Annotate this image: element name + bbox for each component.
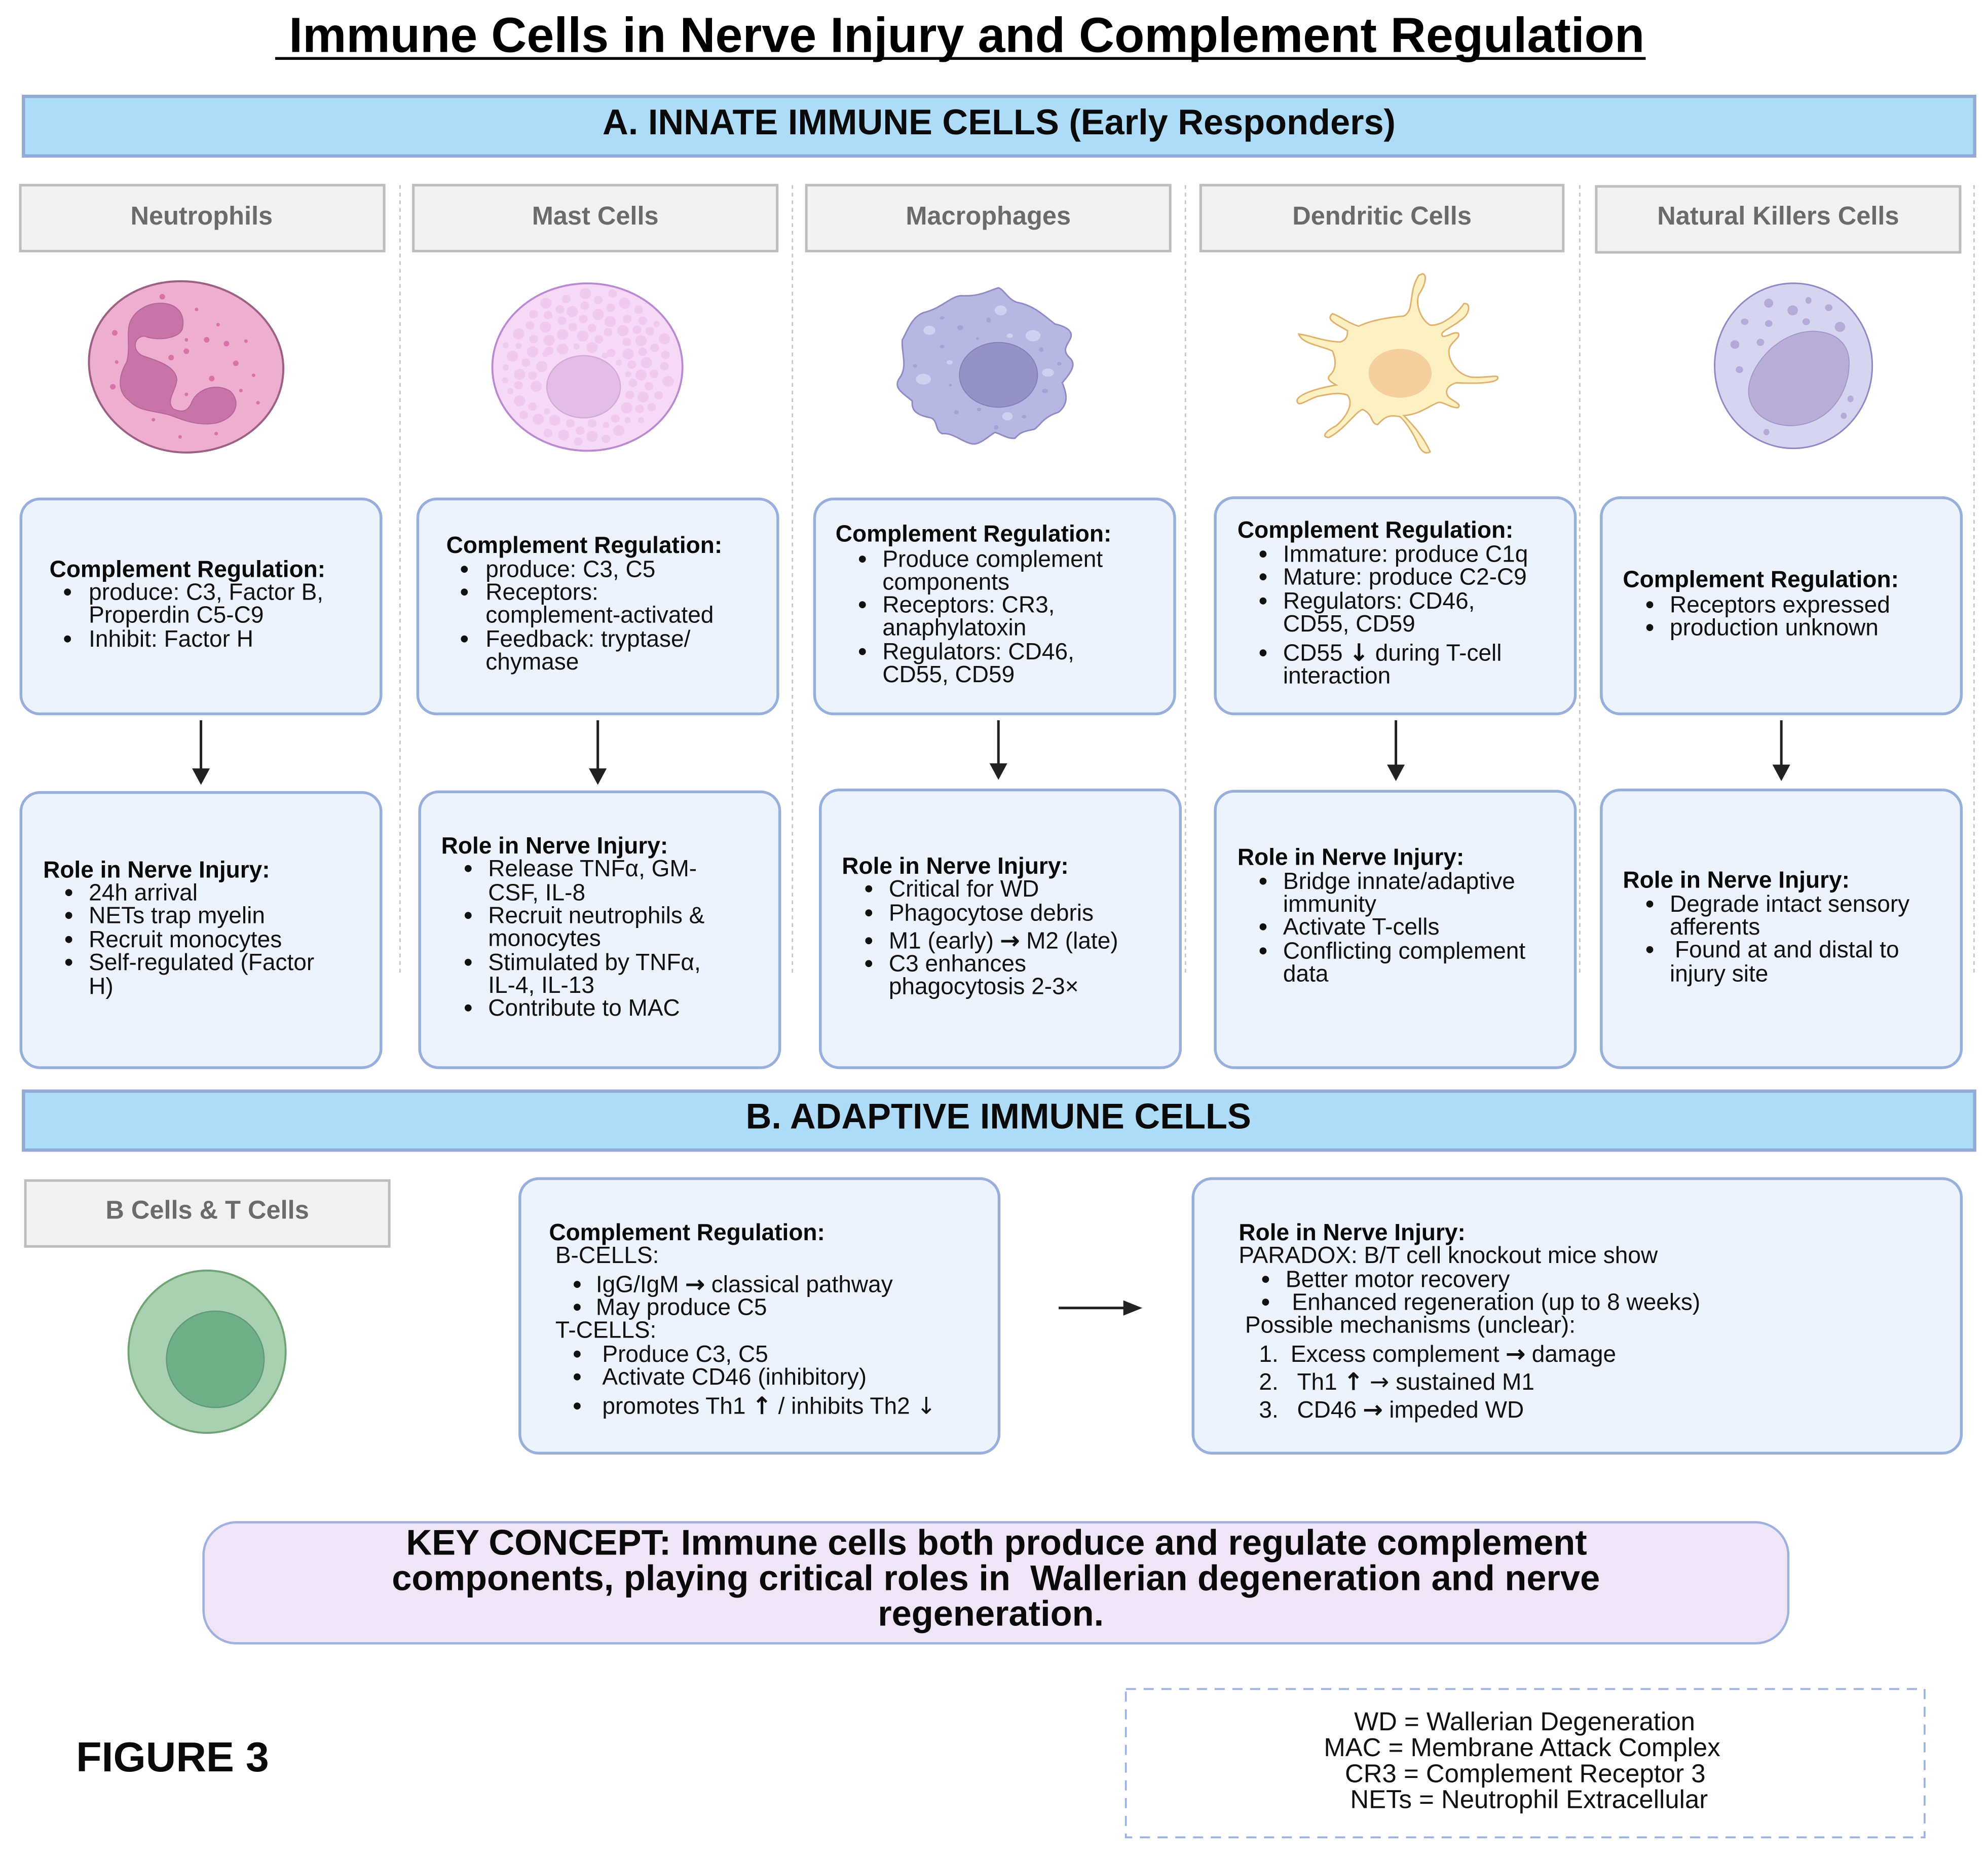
role in nerve injury box: Release TNFα, GM- [488, 855, 697, 881]
complement regulation box [1601, 498, 1961, 714]
arrow [990, 720, 1007, 780]
role in nerve injury box: • [865, 927, 873, 953]
role in nerve injury box: • [464, 994, 472, 1021]
role in nerve injury box: • [65, 926, 73, 952]
role in nerve injury box: Recruit monocytes [89, 926, 282, 952]
complement regulation box [21, 499, 381, 714]
role in nerve injury box: Recruit neutrophils & [488, 902, 704, 928]
complement regulation box: • [1259, 540, 1267, 567]
complement regulation box: • [1259, 639, 1267, 665]
complement regulation box: Complement Regulation: [836, 520, 1111, 546]
role in nerve injury box: 1. [1259, 1341, 1279, 1367]
complement regulation box: • [1259, 587, 1267, 614]
role in nerve injury box: Stimulated by TNFα, [488, 949, 701, 975]
complement regulation box: Produce C3, C5 [602, 1341, 768, 1367]
legend: abbreviations: CR3 = Complement Receptor 3 [1345, 1759, 1706, 1788]
role in nerve injury box: • [865, 875, 873, 902]
complement regulation box [520, 1178, 999, 1453]
role in nerve injury box: • [1261, 1288, 1270, 1315]
panel: neutrophils [20, 185, 384, 1068]
complement regulation box: Complement Regulation: [1623, 566, 1899, 592]
legend: abbreviations: MAC = Membrane Attack Complex [1324, 1733, 1720, 1762]
panel: mast cells [414, 185, 780, 1068]
complement regulation box [814, 499, 1175, 714]
complement regulation box: Complement Regulation: [446, 532, 722, 558]
banner: B. adaptive immune cells [23, 1091, 1975, 1150]
panel: natural killer cells [1596, 187, 1961, 1068]
icon: macrophage cell [897, 288, 1073, 444]
role in nerve injury box: Role in Nerve Injury: [441, 832, 668, 859]
role in nerve injury box: M1 (early) → M2 (late) [889, 926, 1118, 954]
role in nerve injury box: phagocytosis 2-3× [889, 973, 1079, 999]
role in nerve injury box: PARADOX: B/T cell knockout mice show [1239, 1242, 1658, 1268]
icon: dendritic cell [1297, 274, 1498, 453]
complement regulation box: • [573, 1271, 581, 1297]
complement regulation box: CD55, CD59 [1283, 610, 1415, 637]
role in nerve injury box: data [1283, 960, 1329, 986]
complement regulation box: Inhibit: Factor H [89, 625, 253, 652]
role in nerve injury box: • [464, 855, 472, 881]
complement regulation box: Complement Regulation: [549, 1219, 825, 1245]
header: natural killers cells: Natural Killers Cells [1657, 201, 1899, 230]
figure label: FIGURE 3 [76, 1734, 269, 1780]
arrow [1387, 720, 1405, 781]
complement regulation box: CD55, CD59 [882, 661, 1015, 687]
role in nerve injury box: CD46 → impeded WD [1297, 1396, 1524, 1423]
panel: B cells and T cells [25, 1178, 1961, 1453]
arrow [192, 720, 210, 785]
header: dendritic cells: Dendritic Cells [1292, 201, 1472, 230]
role in nerve injury box [21, 793, 381, 1068]
role in nerve injury box: C3 enhances [889, 950, 1026, 976]
role in nerve injury box: • [1259, 937, 1267, 963]
complement regulation box: produce: C3, C5 [485, 555, 655, 582]
arrow [1059, 1301, 1142, 1316]
role in nerve injury box: Role in Nerve Injury: [1237, 843, 1464, 870]
complement regulation box: Regulators: CD46, [1283, 587, 1475, 614]
role in nerve injury box [420, 792, 780, 1068]
complement regulation box: Complement Regulation: [50, 555, 325, 582]
complement regulation box: • [858, 591, 867, 617]
header: neutrophils: Neutrophils [130, 201, 273, 230]
header: macrophages: Macrophages [906, 201, 1071, 230]
role in nerve injury box: H) [89, 973, 114, 999]
role in nerve injury box: Bridge innate/adaptive [1283, 868, 1515, 894]
role in nerve injury box: NETs trap myelin [89, 902, 265, 928]
icon: neutrophil cell [89, 281, 283, 453]
header: neutrophils [20, 185, 384, 251]
arrow [1773, 720, 1790, 781]
role in nerve injury box [1193, 1178, 1961, 1453]
role in nerve injury box: 2. [1259, 1368, 1279, 1395]
role in nerve injury box: Role in Nerve Injury: [43, 856, 270, 882]
role in nerve injury box: Possible mechanisms (unclear): [1245, 1311, 1576, 1338]
role in nerve injury box: • [865, 899, 873, 925]
role in nerve injury box: immunity [1283, 890, 1376, 917]
complement regulation box: Produce complement [882, 545, 1103, 572]
complement regulation box: anaphylatoxin [882, 614, 1026, 640]
role in nerve injury box: Found at and distal to [1675, 936, 1899, 962]
header: mast cells [414, 185, 777, 251]
complement regulation box: • [858, 545, 867, 572]
complement regulation box: B-CELLS: [555, 1242, 659, 1268]
panel: macrophages [806, 185, 1180, 1068]
header: B cells and T cells: B Cells & T Cells [105, 1195, 309, 1224]
role in nerve injury box [820, 790, 1180, 1068]
icon: lymphocyte [128, 1271, 286, 1433]
role in nerve injury box: Better motor recovery [1286, 1266, 1510, 1292]
role in nerve injury box: Role in Nerve Injury: [1623, 866, 1850, 893]
header: mast cells: Mast Cells [532, 201, 659, 230]
role in nerve injury box: Role in Nerve Injury: [1239, 1219, 1466, 1245]
role in nerve injury box: Critical for WD [889, 875, 1039, 902]
complement regulation box: IgG/IgM → classical pathway [596, 1270, 893, 1297]
complement regulation box: chymase [485, 648, 579, 675]
complement regulation box: complement-activated [485, 601, 714, 627]
role in nerve injury box: CSF, IL-8 [488, 879, 585, 905]
legend: abbreviations: WD = Wallerian Degeneration [1354, 1707, 1695, 1736]
complement regulation box: • [1259, 563, 1267, 589]
arrow [589, 720, 607, 785]
role in nerve injury box: IL-4, IL-13 [488, 972, 594, 998]
complement regulation box: Immature: produce C1q [1283, 540, 1528, 567]
complement regulation box: produce: C3, Factor B, [89, 578, 323, 605]
title: Immune Cells in Nerve Injury and Complement Regulation [289, 8, 1644, 63]
complement regulation box: • [573, 1393, 581, 1419]
role in nerve injury box: • [1645, 890, 1654, 917]
complement regulation box: production unknown [1670, 614, 1879, 640]
role in nerve injury box: • [464, 949, 472, 975]
complement regulation box: • [573, 1341, 581, 1367]
header: macrophages [806, 185, 1170, 251]
complement regulation box: May produce C5 [596, 1293, 767, 1320]
complement regulation box: • [63, 578, 71, 605]
complement regulation box: • [573, 1363, 581, 1390]
role in nerve injury box: Activate T-cells [1283, 913, 1440, 940]
complement regulation box [1215, 498, 1576, 714]
legend: abbreviations: NETs = Neutrophil Extracellular [1350, 1785, 1708, 1814]
banner: B. adaptive immune cells: B. ADAPTIVE IMMUNE CELLS [746, 1096, 1251, 1136]
role in nerve injury box [1601, 790, 1961, 1068]
header: B cells and T cells [25, 1180, 389, 1246]
complement regulation box: promotes Th1 ↑ / inhibits Th2 ↓ [602, 1392, 936, 1420]
role in nerve injury box: monocytes [488, 924, 601, 951]
role in nerve injury box: Enhanced regeneration (up to 8 weeks) [1292, 1288, 1700, 1315]
role in nerve injury box: • [1645, 936, 1654, 962]
role in nerve injury box: Degrade intact sensory [1670, 890, 1909, 917]
role in nerve injury box: 3. [1259, 1396, 1279, 1423]
complement regulation box: interaction [1283, 662, 1391, 689]
role in nerve injury box: afferents [1670, 913, 1760, 940]
role in nerve injury box: Conflicting complement [1283, 937, 1525, 963]
legend: abbreviations [1126, 1689, 1925, 1837]
role in nerve injury box [1215, 791, 1576, 1068]
callout: key concept [204, 1522, 1788, 1643]
complement regulation box: • [460, 578, 468, 605]
role in nerve injury box: Role in Nerve Injury: [842, 852, 1069, 879]
complement regulation box [418, 499, 778, 714]
icon: natural killer cell [1715, 283, 1872, 449]
header: dendritic cells [1201, 185, 1563, 251]
complement regulation box: • [1645, 591, 1654, 617]
complement regulation box: Receptors: CR3, [882, 591, 1055, 617]
banner: A. innate immune cells: A. INNATE IMMUNE CELLS (Early Responders) [603, 102, 1396, 142]
complement regulation box: • [63, 625, 71, 652]
role in nerve injury box: injury site [1670, 960, 1768, 986]
callout: key concept: components, playing critical roles in Wallerian degeneration and nerve [392, 1557, 1600, 1598]
banner: A. innate immune cells [23, 96, 1975, 156]
role in nerve injury box: • [65, 949, 73, 975]
role in nerve injury box: • [65, 879, 73, 905]
complement regulation box: Receptors: [485, 578, 598, 605]
role in nerve injury box: Th1 ↑ → sustained M1 [1297, 1368, 1534, 1395]
header: natural killers cells [1596, 187, 1960, 252]
role in nerve injury box: • [464, 902, 472, 928]
role in nerve injury box: • [1259, 913, 1267, 940]
complement regulation box: Complement Regulation: [1237, 516, 1513, 543]
complement regulation box: • [460, 625, 468, 652]
role in nerve injury box: Self-regulated (Factor [89, 949, 314, 975]
complement regulation box: T-CELLS: [555, 1316, 656, 1343]
role in nerve injury box: • [1261, 1266, 1270, 1292]
complement regulation box: • [858, 638, 867, 664]
complement regulation box: Activate CD46 (inhibitory) [602, 1363, 867, 1390]
complement regulation box: Feedback: tryptase/ [485, 625, 691, 652]
callout: key concept: regeneration. [878, 1593, 1104, 1633]
complement regulation box: Properdin C5-C9 [89, 601, 264, 627]
complement regulation box: components [882, 568, 1009, 595]
complement regulation box: Regulators: CD46, [882, 638, 1074, 664]
role in nerve injury box: • [65, 902, 73, 928]
complement regulation box: Receptors expressed [1670, 591, 1890, 617]
role in nerve injury box: 24h arrival [89, 879, 198, 905]
complement regulation box: • [1645, 614, 1654, 640]
role in nerve injury box: Contribute to MAC [488, 994, 680, 1021]
icon: mast cell [493, 283, 683, 451]
role in nerve injury box: Excess complement → damage [1291, 1340, 1616, 1367]
complement regulation box: • [573, 1293, 581, 1320]
complement regulation box: • [460, 555, 468, 582]
complement regulation box: CD55 ↓ during T-cell [1283, 639, 1502, 666]
role in nerve injury box: • [865, 950, 873, 976]
complement regulation box: Mature: produce C2-C9 [1283, 563, 1527, 589]
role in nerve injury box: Phagocytose debris [889, 899, 1094, 925]
callout: key concept: KEY CONCEPT: Immune cells both produce and regulate complement [406, 1522, 1587, 1562]
panel: dendritic cells [1201, 185, 1576, 1068]
role in nerve injury box: • [1259, 868, 1267, 894]
